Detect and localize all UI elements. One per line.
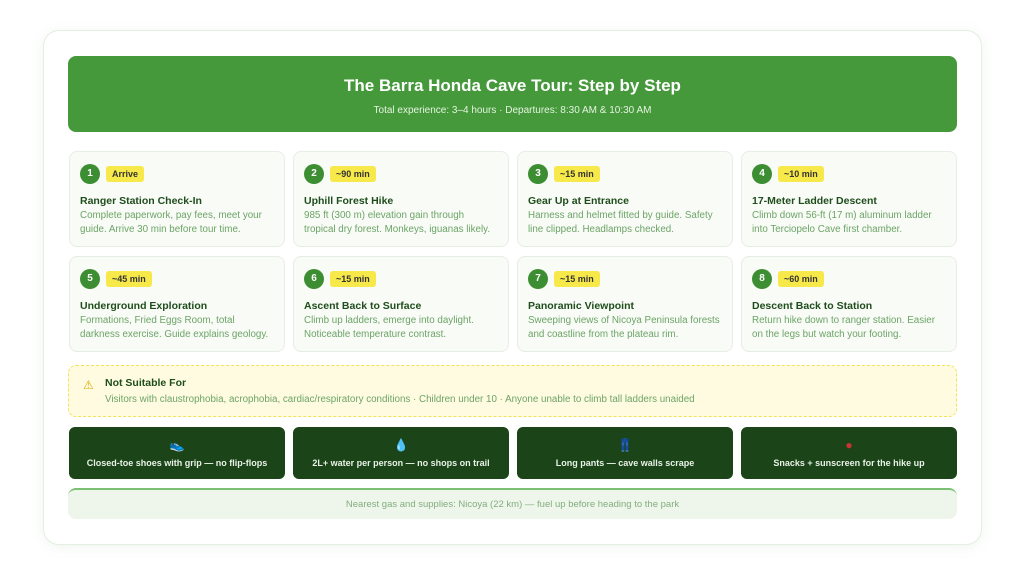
step 5: Formations, Fried Eggs Room, total darkness exercise. Guide explains geology. <box>80 315 268 340</box>
step 8: Descent Back to Station <box>752 300 872 312</box>
step 5: ~45 min <box>112 274 146 284</box>
step 4: Climb down 56-ft (17 m) aluminum ladder into Terciopelo Cave first chamber. <box>752 210 932 235</box>
step 4: ~10 min <box>784 169 818 179</box>
step 1: Complete paperwork, pay fees, meet your guide. Arrive 30 min before tour time. <box>80 210 262 235</box>
step 8: ~60 min <box>784 274 818 284</box>
tip: shoes: Closed-toe shoes with grip — no flip-flops <box>87 458 267 468</box>
step 1: 1 <box>87 168 93 179</box>
step 1: Ranger Station Check-In <box>80 195 202 207</box>
tip: snacks: Snacks + sunscreen for the hike up <box>773 458 925 468</box>
step 3: Harness and helmet fitted by guide. Safety line clipped. Headlamps checked. <box>528 210 713 235</box>
tip: snacks: ● <box>845 438 853 452</box>
step 5: Underground Exploration <box>80 300 207 312</box>
step 6: ~15 min <box>336 274 370 284</box>
title: The Barra Honda Cave Tour: Step by Step <box>344 76 681 95</box>
step 7 <box>517 256 733 352</box>
footer note: Nearest gas and supplies: Nicoya (22 km) — fuel up before heading to the park <box>346 499 679 510</box>
step 7: ~15 min <box>560 274 594 284</box>
step 7: 7 <box>535 273 541 284</box>
warning panel <box>68 365 957 417</box>
icon: warning: ⚠ <box>83 378 94 392</box>
step 4 <box>741 151 957 247</box>
warning heading: Not Suitable For <box>105 377 186 389</box>
step 7: Panoramic Viewpoint <box>528 300 634 312</box>
step 4: 4 <box>759 168 765 179</box>
subtitle: Total experience: 3–4 hours · Departures: 8:30 AM & 10:30 AM <box>374 105 651 116</box>
warning text: Visitors with claustrophobia, acrophobia, cardiac/respiratory conditions · Children under 10 · Anyone unable to climb tall ladders unaided <box>105 394 695 405</box>
step 6: Climb up ladders, emerge into daylight. Noticeable temperature contrast. <box>304 315 474 340</box>
step 3: ~15 min <box>560 169 594 179</box>
header banner <box>68 56 957 132</box>
tip: snacks <box>741 427 957 479</box>
tip: pants <box>517 427 733 479</box>
step 8: 8 <box>759 273 765 284</box>
step 8: Return hike down to ranger station. Easier on the legs but watch your footing. <box>752 315 935 340</box>
step 5: 5 <box>87 273 93 284</box>
tip: pants: 👖 <box>618 438 632 452</box>
footer note <box>68 488 957 519</box>
step 2: 985 ft (300 m) elevation gain through tropical dry forest. Monkeys, iguanas likely. <box>304 210 490 235</box>
tip: water: 2L+ water per person — no shops on trail <box>312 458 490 468</box>
step 2: Uphill Forest Hike <box>304 195 393 207</box>
step 3: Gear Up at Entrance <box>528 195 629 207</box>
tip: shoes: 👟 <box>170 438 184 452</box>
tip: shoes <box>69 427 285 479</box>
step 3: 3 <box>535 168 541 179</box>
step 6 <box>293 256 509 352</box>
step 4: 17-Meter Ladder Descent <box>752 195 877 207</box>
step 1: Arrive <box>112 169 138 179</box>
step 7: Sweeping views of Nicoya Peninsula forests and coastline from the plateau rim. <box>528 315 720 340</box>
step 2: 2 <box>311 168 317 179</box>
tip: pants: Long pants — cave walls scrape <box>556 458 694 468</box>
step 6: 6 <box>311 273 317 284</box>
tip: water: 💧 <box>394 438 408 452</box>
step 8 <box>741 256 957 352</box>
step 2 <box>293 151 509 247</box>
step 1 <box>69 151 285 247</box>
step 5 <box>69 256 285 352</box>
step 3 <box>517 151 733 247</box>
step 2: ~90 min <box>336 169 370 179</box>
step 6: Ascent Back to Surface <box>304 300 421 312</box>
tip: water <box>293 427 509 479</box>
